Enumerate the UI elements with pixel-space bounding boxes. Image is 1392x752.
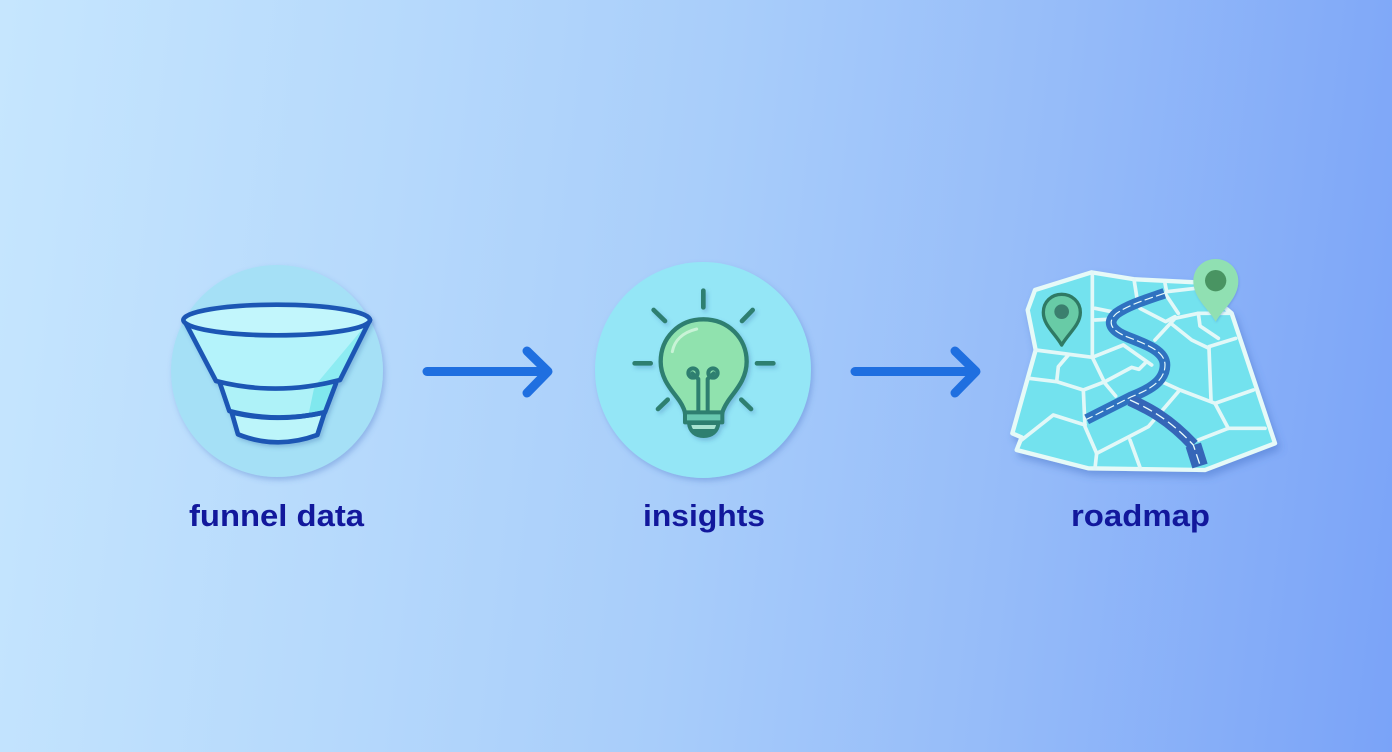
- bulb rays: [635, 291, 773, 409]
- map pin: right: [1193, 259, 1238, 322]
- label: roadmap: roadmap: [1071, 498, 1210, 533]
- icon: funnel: [183, 305, 370, 442]
- label: insights: insights: [643, 498, 765, 533]
- filament: [688, 368, 718, 410]
- label: funnel data: funnel data: [189, 498, 365, 533]
- bulb base: [689, 423, 718, 436]
- icon: light bulb: [635, 291, 773, 436]
- arrow: funnel to insights: [427, 351, 548, 393]
- icon: roadmap: [1012, 259, 1275, 470]
- map streets: [1022, 272, 1265, 468]
- map pin: left: [1043, 294, 1080, 345]
- arrow: insights to roadmap: [855, 351, 976, 393]
- route: [1087, 293, 1200, 466]
- step 1: funnel data: [171, 265, 383, 477]
- step 2: insights: [595, 262, 811, 478]
- insights backdrop circle: [595, 262, 811, 478]
- bulb glass: [661, 319, 747, 413]
- funnel backdrop circle: [171, 265, 383, 477]
- map sheet: [1012, 272, 1275, 470]
